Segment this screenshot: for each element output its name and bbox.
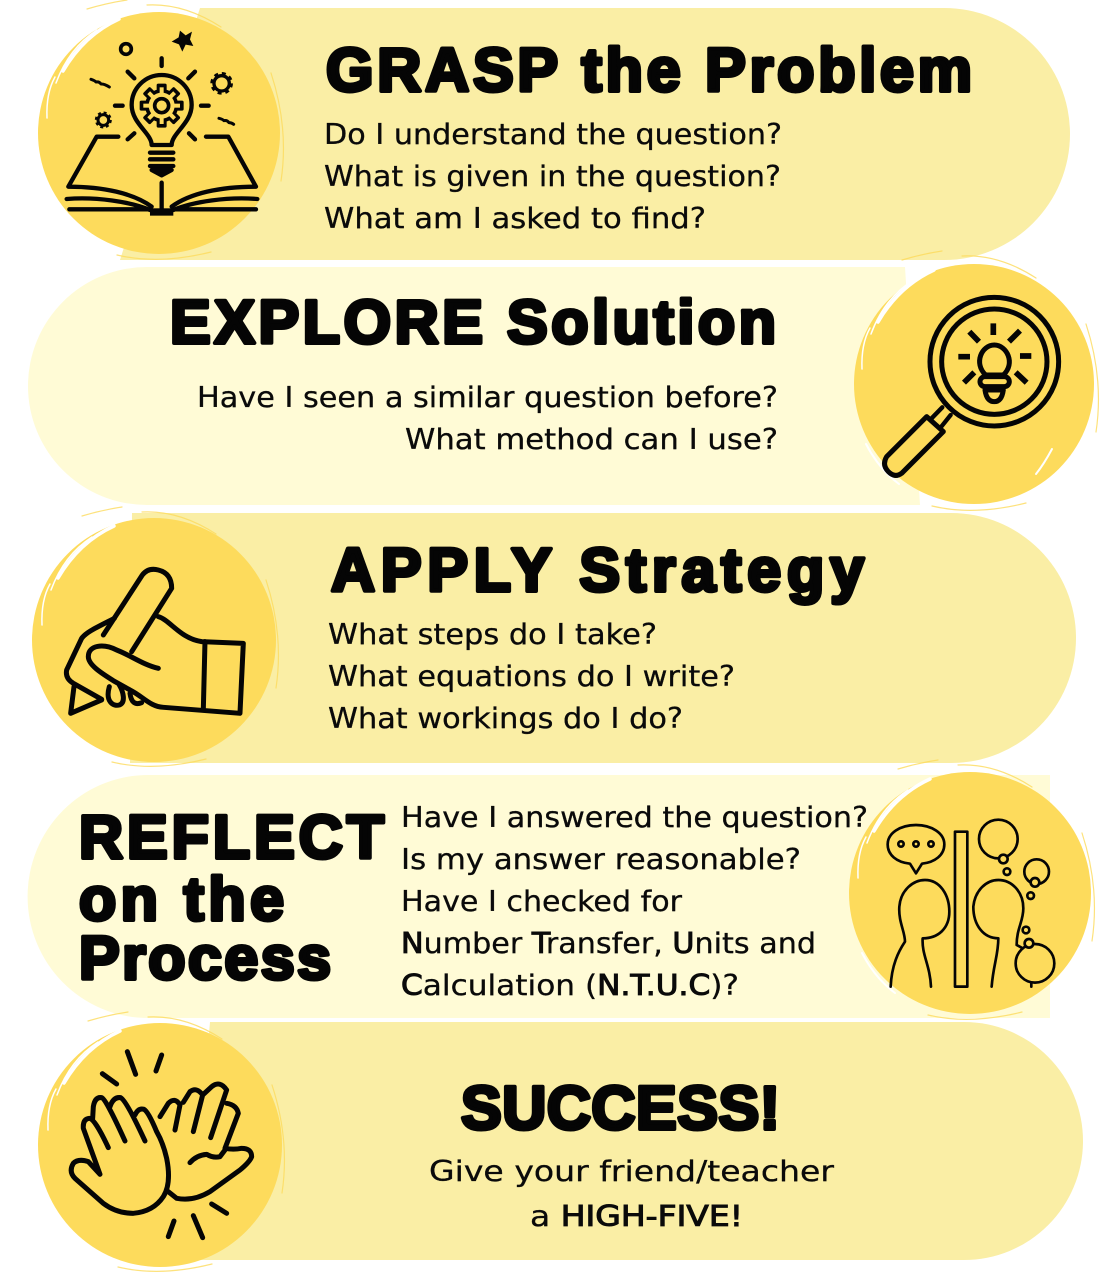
text block: Give your friend/teacher xyxy=(429,1155,834,1188)
text block xyxy=(324,118,782,235)
icon: book and light bulb xyxy=(67,31,257,216)
text block: What am I asked to find? xyxy=(324,202,706,235)
text block: Have I answered the question? xyxy=(401,801,868,834)
text block: Have I checked for xyxy=(401,885,682,918)
panel: REFLECT on the Process xyxy=(28,760,1094,1019)
icon: two people with thought bubbles xyxy=(888,820,1054,987)
text block: Do I understand the question? xyxy=(324,118,782,151)
icon: hand writing with pencil xyxy=(66,569,243,713)
heading: EXPLORE Solution xyxy=(170,288,776,356)
heading: Process xyxy=(79,924,331,992)
brush circle: REFLECT xyxy=(849,760,1094,1019)
text block: Is my answer reasonable? xyxy=(401,843,801,876)
text block: What steps do I take? xyxy=(328,618,657,651)
panel: SUCCESS! xyxy=(38,1012,1083,1271)
text block: What is given in the question? xyxy=(324,160,781,193)
text block xyxy=(197,381,778,456)
brush circle: APPLY xyxy=(32,507,278,766)
icon: magnifying glass with bulb xyxy=(885,297,1059,475)
text block: Have I seen a similar question before? xyxy=(197,381,778,414)
panel: GRASP the Problem xyxy=(38,0,1070,260)
text block xyxy=(429,1155,834,1233)
heading: on the xyxy=(79,865,284,933)
panel: EXPLORE Solution xyxy=(28,251,1098,510)
text block: What equations do I write? xyxy=(328,660,735,693)
text block: a HIGH-FIVE! xyxy=(530,1200,743,1233)
brush circle: SUCCESS xyxy=(38,1012,284,1271)
brush circle: EXPLORE xyxy=(854,251,1098,510)
text block: Calculation ( N.T.U.C )? xyxy=(401,969,739,1002)
brush circle: GRASP xyxy=(38,0,283,259)
heading: SUCCESS! xyxy=(461,1074,780,1142)
icon: high five hands xyxy=(71,1052,252,1238)
panel: APPLY Strategy xyxy=(32,507,1076,766)
text block: Number Transfer, Units and xyxy=(401,927,816,960)
text block: What method can I use? xyxy=(405,423,778,456)
heading: GRASP the Problem xyxy=(326,36,972,104)
text block xyxy=(328,618,735,735)
heading: REFLECT xyxy=(79,803,384,871)
text block xyxy=(401,801,868,1002)
heading: APPLY Strategy xyxy=(331,536,864,604)
heading xyxy=(79,803,384,992)
text block: What workings do I do? xyxy=(328,702,683,735)
